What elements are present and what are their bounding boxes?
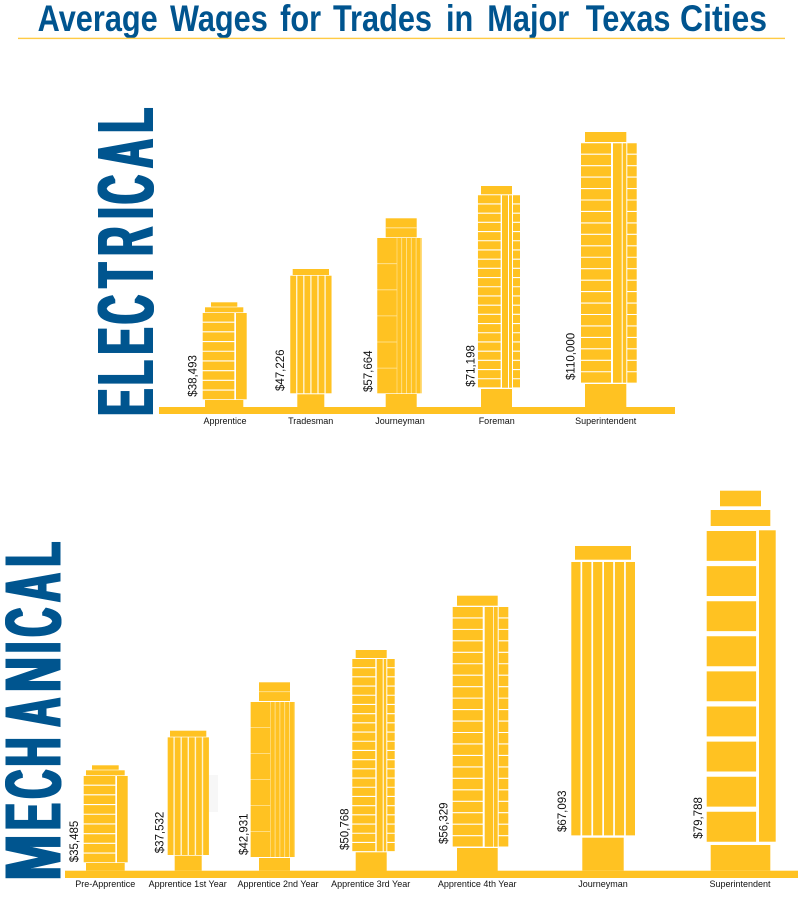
building: Apprentice $38,493: $38,493: [188, 355, 200, 397]
building: Journeyman $67,093: [557, 546, 635, 889]
building: Superintendent $79,788: Superintendent: [709, 879, 771, 889]
building: Tradesman $47,226: [275, 269, 333, 426]
building: Apprentice 3rd Year $50,768: $50,768: [340, 808, 352, 850]
building: Superintendent $110,000: $110,000: [566, 333, 578, 380]
building: Foreman $71,198: $71,198: [466, 345, 478, 387]
building: Apprentice 1st Year $37,532: [149, 731, 227, 889]
building: Apprentice 4th Year $56,329: $56,329: [438, 802, 450, 844]
building: Apprentice 2nd Year $42,931: Apprentice 2nd Year: [237, 879, 319, 889]
building: Superintendent $79,788: [693, 491, 776, 889]
building: Pre-Apprentice $35,485: [69, 765, 135, 889]
building: Journeyman $67,093: Journeyman: [578, 879, 628, 889]
building: Apprentice $38,493: Apprentice: [203, 416, 247, 426]
building: Apprentice 2nd Year $42,931: $42,931: [239, 813, 251, 855]
building: Superintendent $110,000: [566, 132, 637, 426]
building: Journeyman $57,664: $57,664: [363, 350, 375, 392]
building: Apprentice 4th Year $56,329: Apprentice 4th Year: [438, 879, 516, 889]
building: Foreman $71,198: [466, 186, 516, 426]
building: Apprentice 1st Year $37,532: $37,532: [154, 812, 166, 853]
building: Journeyman $57,664: Journeyman: [375, 416, 425, 426]
building: Superintendent $79,788: $79,788: [693, 797, 705, 839]
building: Foreman $71,198: Foreman: [479, 416, 515, 426]
building: Journeyman $67,093: $67,093: [557, 790, 569, 832]
building: Tradesman $47,226: $47,226: [275, 349, 287, 391]
building: Apprentice 4th Year $56,329: [438, 596, 516, 889]
panel: electrical: [82, 108, 675, 426]
heading: mechanical: [0, 542, 78, 880]
ground bar: electrical: [159, 407, 675, 414]
building: Apprentice 2nd Year $42,931: [237, 682, 319, 889]
building: Apprentice 3rd Year $50,768: Apprentice 3rd Year: [331, 879, 410, 889]
building: Apprentice $38,493: [188, 302, 247, 426]
ground bar: mechanical: [65, 871, 798, 878]
building: Superintendent $110,000: Superintendent: [575, 416, 637, 426]
panel: mechanical: [0, 491, 798, 889]
building: Apprentice 3rd Year $50,768: [331, 650, 410, 889]
building: Tradesman $47,226: Tradesman: [288, 416, 333, 426]
heading: electrical: ELECTRICAL: [82, 108, 171, 415]
building: Pre-Apprentice $35,485: Pre-Apprentice: [75, 879, 135, 889]
building: Journeyman $57,664: [363, 218, 425, 426]
building: Pre-Apprentice $35,485: $35,485: [69, 821, 81, 862]
building: Apprentice 1st Year $37,532: Apprentice 1st Year: [149, 879, 227, 889]
